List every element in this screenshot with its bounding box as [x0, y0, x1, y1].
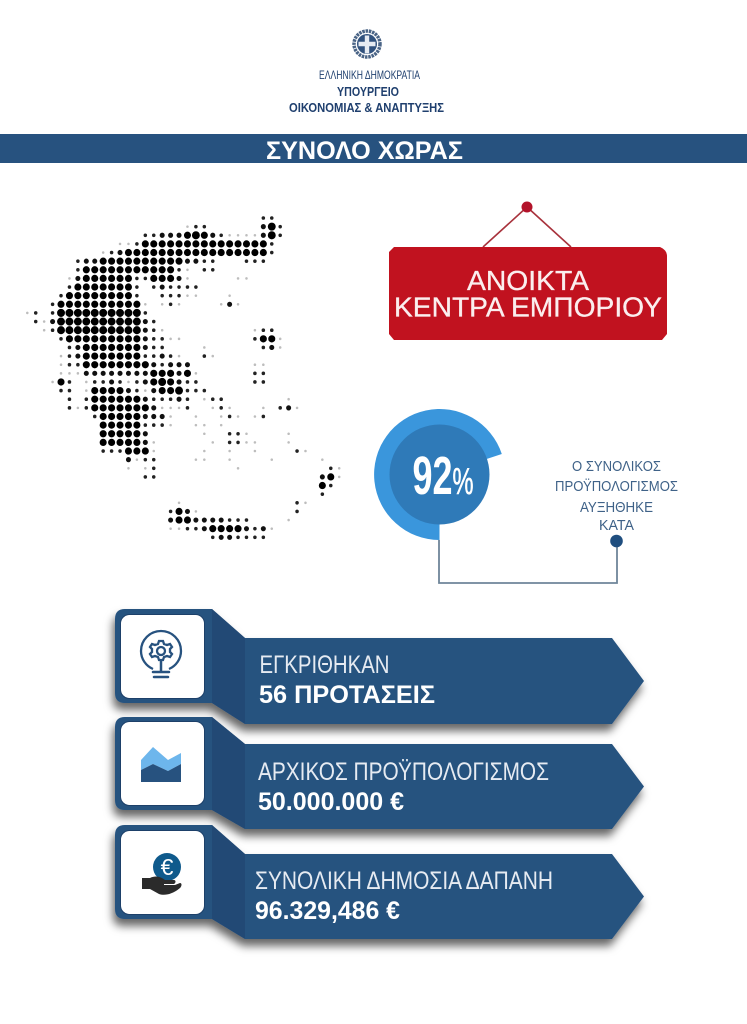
logo text: [289, 68, 444, 115]
panel: initial budget: [115, 717, 644, 829]
donut ring: [374, 409, 502, 540]
percentage: 92: [412, 446, 452, 506]
percentage: %: [452, 461, 474, 502]
sign text: ΑΝΟΙΚΤΑ: [467, 265, 590, 296]
panel: approved proposals: [115, 609, 644, 724]
icon: lightbulb with gear: [141, 631, 181, 677]
caption: budget increased by: [555, 459, 678, 534]
panel text: [255, 867, 553, 925]
panel text: 96.329,486 €: [255, 897, 400, 925]
donut centre: [390, 424, 490, 524]
panel text: ΑΡΧΙΚΟΣ ΠΡΟΫΠΟΛΟΓΙΣΜΟΣ: [258, 758, 549, 786]
caption: budget increased by: Ο ΣΥΝΟΛΙΚΟΣ: [572, 459, 661, 475]
halftone map of Greece: [27, 218, 339, 537]
icon: greek emblem: [354, 31, 380, 57]
panel text: ΕΓΚΡΙΘΗΚΑΝ: [260, 651, 390, 679]
icon: hand holding euro coin: €: [161, 854, 174, 880]
sign board: [389, 247, 667, 340]
panel text: 56 ΠΡΟΤΑΣΕΙΣ: [259, 681, 435, 709]
92% donut stat: [374, 409, 502, 540]
hanging sign: open trade centres: [389, 202, 667, 340]
logo text: ΕΛΛΗΝΙΚΗ ΔΗΜΟΚΡΑΤΙΑ: [319, 68, 420, 82]
sign text: ΚΕΝΤΡΑ ΕΜΠΟΡΙΟΥ: [394, 292, 662, 322]
title banner: [0, 134, 747, 165]
panel shape: [115, 825, 644, 939]
panel text: ΣΥΝΟΛΙΚΗ ΔΗΜΟΣΙΑ ΔΑΠΑΝΗ: [255, 867, 553, 895]
logo text: ΥΠΟΥΡΓΕΙΟ: [337, 85, 399, 99]
connector line with dot: [439, 535, 623, 583]
panel text: 50.000.000 €: [258, 788, 404, 816]
icon tile: [120, 722, 204, 806]
ministry logo: [289, 31, 444, 115]
icon: hand holding euro coin: [142, 853, 182, 895]
icon tile: [120, 830, 204, 914]
icon tile: [120, 614, 204, 698]
sign text: [394, 265, 662, 322]
panel shape: [115, 609, 644, 724]
panel text: [258, 758, 549, 816]
caption: budget increased by: ΚΑΤΑ: [599, 518, 634, 534]
panel text: [259, 651, 435, 709]
panel: total public expenditure: [115, 825, 644, 939]
caption: budget increased by: ΠΡΟΫΠΟΛΟΓΙΣΜΟΣ: [555, 478, 678, 495]
caption: budget increased by: ΑΥΞΗΘΗΚΕ: [580, 500, 653, 516]
panel shape: [115, 717, 644, 829]
sign string and pin: [483, 202, 571, 247]
logo text: ΟΙΚΟΝΟΜΙΑΣ & ΑΝΑΠΤΥΞΗΣ: [289, 100, 444, 115]
icon: area chart: [141, 747, 181, 782]
title banner: ΣΥΝΟΛΟ ΧΩΡΑΣ: [266, 137, 463, 165]
